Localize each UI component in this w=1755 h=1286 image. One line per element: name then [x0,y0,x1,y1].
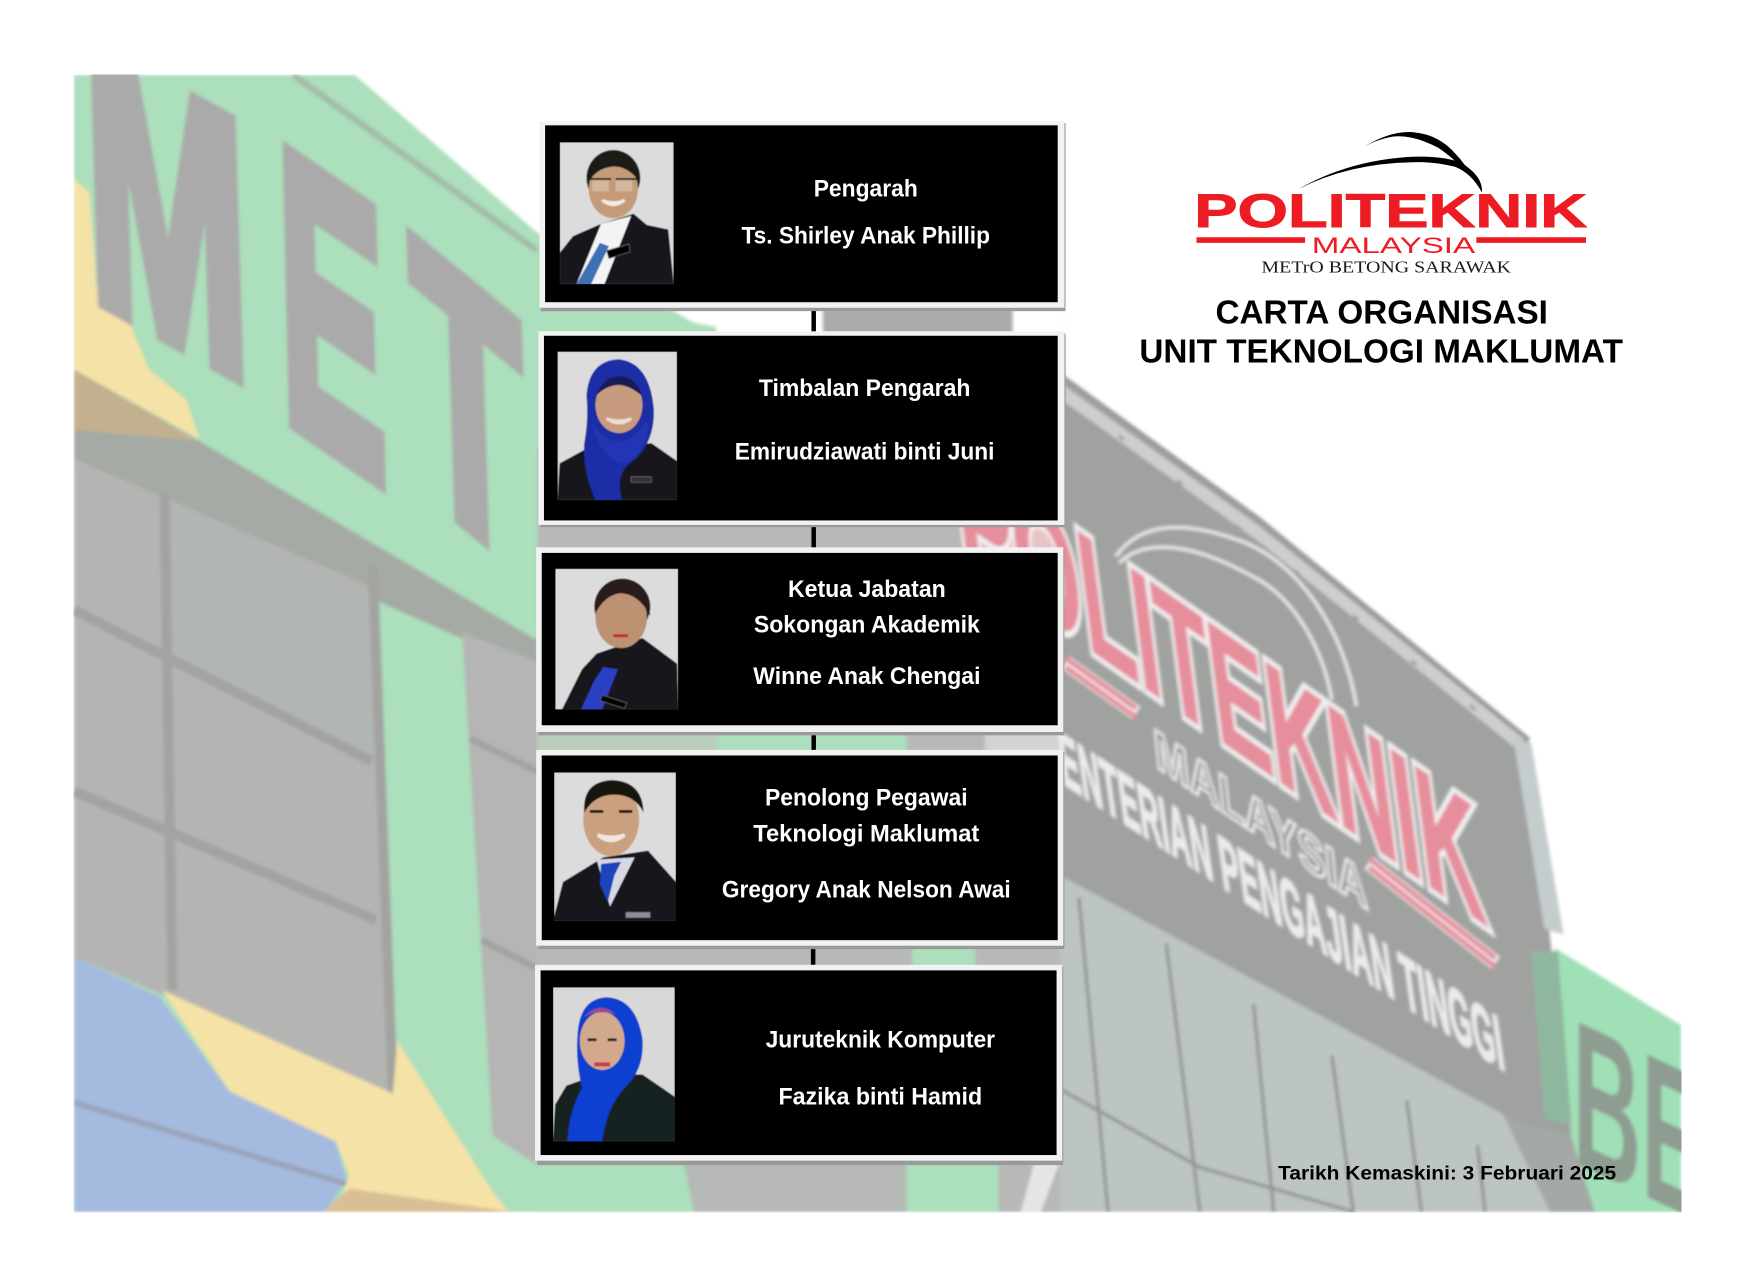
sign lettering MALAYSIA: MALAYSIA [1151,717,1370,923]
name: Gregory: Gregory Anak Nelson Awai [722,876,1011,903]
box: Ketua Jabatan [536,547,1064,735]
role: Penolong Pegawai line 1: Penolong Pegawai [765,785,968,812]
blue panel [74,957,347,1212]
name: Winne: Winne Anak Chengai [753,663,980,690]
sign stripes [1066,658,1495,967]
lettering BE: BE [1573,974,1705,1268]
middle strips behind the boxes [537,293,1064,1212]
logo campus name: METrO BETONG SARAWAK [1261,258,1512,277]
yellow corner panel [74,179,199,439]
title: UNIT TEKNOLOGI MAKLUMAT [1139,334,1623,371]
box: Pengarah [539,121,1066,311]
name: Shirley: Ts. Shirley Anak Phillip [742,223,990,250]
photo: Emirudziawati [557,351,677,500]
left windows [74,459,393,1093]
logo bars [1196,237,1586,243]
box: Penolong Pegawai [536,750,1064,949]
signboard [1060,375,1571,1136]
building lettering MET: E [274,62,390,570]
sign lettering ministry: ENTERIAN PENGAJIAN TINGGI [1053,713,1509,1089]
role: Pengarah: Pengarah [814,176,918,203]
name: Emirudziawati: Emirudziawati binti Juni [735,439,994,466]
sign lettering POLITEKNIK: POLITEKNIK [942,405,1493,963]
photo: Winne [555,569,678,710]
photo: Shirley [560,142,674,284]
footer update date: Tarikh Kemaskini: 3 Februari 2025 [1278,1163,1616,1185]
sign arch [1116,527,1357,706]
lower sign shadow [1504,1114,1596,1212]
right green wall [1555,948,1681,1212]
building lettering MET [89,74,525,551]
dark band under fascia [74,430,537,672]
right glass facade [1063,877,1551,1212]
name: Fazika: Fazika binti Hamid [778,1083,982,1110]
role: Ketua Jabatan line 2: Sokongan Akademik [754,612,981,639]
role: Ketua Jabatan line 1: Ketua Jabatan [788,576,946,603]
yellow stripe [162,991,509,1212]
photo: Fazika [553,987,675,1142]
title [1139,294,1623,371]
title: CARTA ORGANISASI [1216,294,1548,331]
role: Timbalan Pengarah: Timbalan Pengarah [759,375,970,402]
second window block [462,632,539,1166]
box: Juruteknik Komputer [535,965,1063,1165]
logo swoosh [1298,132,1482,193]
brown band [74,369,198,442]
role: Juruteknik Komputer: Juruteknik Komputer [766,1026,995,1053]
sign lettering POLITEKNIK: POLITEKNIK [942,405,1493,963]
box: Timbalan Pengarah [538,331,1066,527]
role: Penolong Pegawai line 2: Teknologi Maklumat [753,820,979,847]
photo: Gregory [553,772,676,921]
logo subtitle: MALAYSIA [1312,233,1476,258]
left building green fascia [74,74,692,1212]
logo: Politeknik Malaysia [1194,132,1587,277]
connector lines [811,304,816,974]
building lettering MET: T [406,160,530,650]
logo wordmark: POLITEKNIK [1194,184,1587,237]
